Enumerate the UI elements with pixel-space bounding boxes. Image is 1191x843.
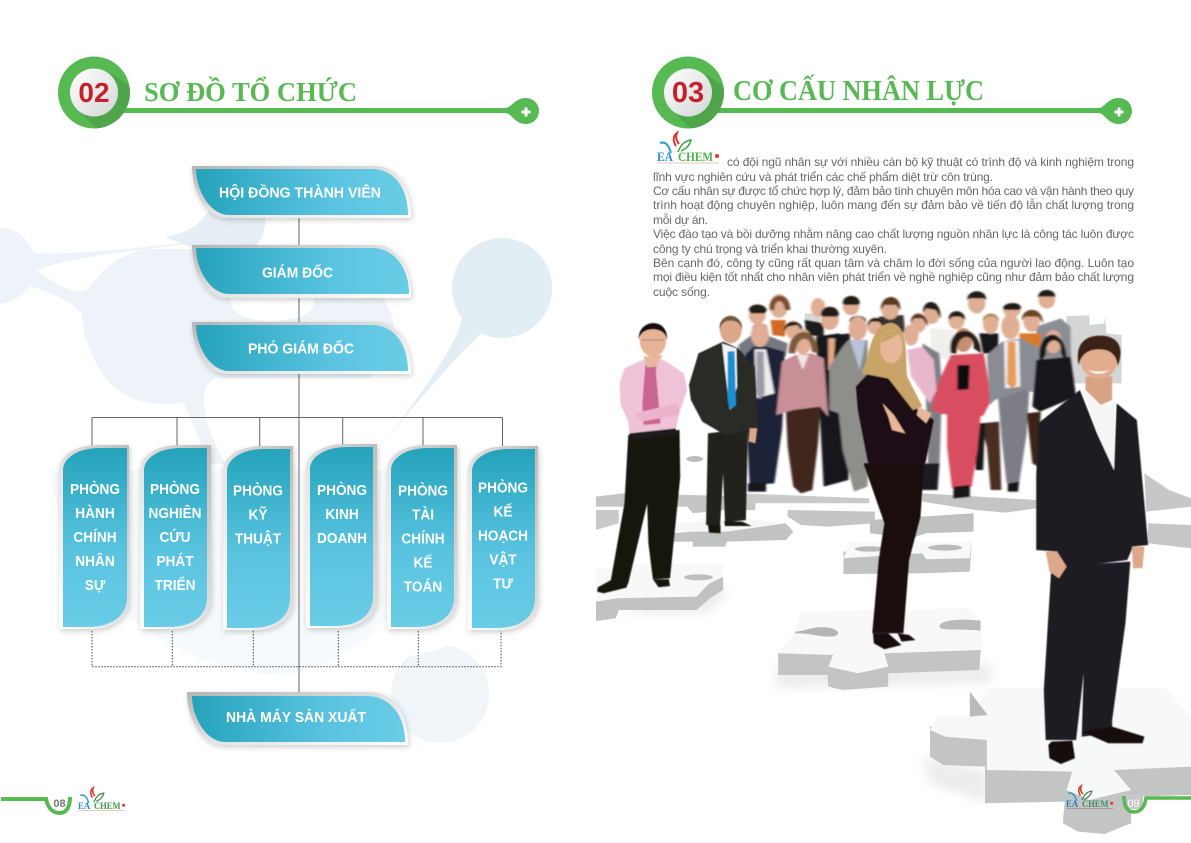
department: phong kinh doanh bbox=[306, 444, 377, 628]
woman legs behind bbox=[980, 422, 1001, 490]
footer left logo: CHEM bbox=[94, 802, 121, 812]
box: giam doc: GIÁM ĐỐC bbox=[262, 264, 333, 282]
box: pho giam doc bbox=[192, 322, 411, 374]
box: hoi dong thanh vien: HỘI ĐỒNG THÀNH VIÊN bbox=[219, 184, 381, 202]
department: phong kinh doanh: KINH bbox=[325, 506, 359, 523]
background: pale molecule shapes bbox=[0, 205, 552, 743]
inline logo: EA CHEM: EA bbox=[657, 150, 673, 164]
title: co cau nhan luc: CƠ CẤU NHÂN LỰC bbox=[733, 75, 984, 107]
woman in front bbox=[856, 323, 934, 649]
department: phong hanh chinh nhan su: PHÒNG bbox=[70, 479, 120, 498]
box: hoi dong thanh vien bbox=[192, 166, 411, 218]
body text: cuộc sống. bbox=[653, 285, 710, 299]
department: phong nghien cuu phat trien: PHÁT bbox=[156, 552, 194, 570]
department: phong ke hoach vat tu: KẾ bbox=[494, 503, 512, 521]
department: phong nghien cuu phat trien bbox=[140, 445, 211, 629]
department: phong hanh chinh nhan su: SỰ bbox=[85, 577, 105, 594]
body text: mọi điều kiện tốt nhất cho nhân viên phát triển về nghề nghiệp cũng như đảm bảo chất lượng bbox=[653, 270, 1134, 284]
department: phong ke hoach vat tu: PHÒNG bbox=[478, 478, 528, 497]
footer left logo bbox=[78, 788, 125, 812]
department: phong ky thuat: THUẬT bbox=[235, 529, 281, 548]
background crowd bbox=[738, 290, 1076, 498]
man pink shirt back bbox=[922, 343, 942, 468]
department: phong kinh doanh: DOANH bbox=[317, 530, 367, 547]
number 02: 02 bbox=[78, 77, 110, 108]
heads back row bbox=[749, 291, 1055, 339]
man grey suit centre bbox=[829, 340, 871, 492]
department: phong tai chinh ke toan: KẾ bbox=[414, 554, 432, 572]
man dark suit bbox=[816, 333, 850, 487]
body text: lĩnh vực nghiên cứu và phát triển các chế phẩm diệt trừ côn trùng. bbox=[653, 170, 993, 184]
department: phong ky thuat bbox=[223, 446, 293, 630]
department: phong ky thuat: PHÒNG bbox=[233, 481, 283, 500]
box: nha may san xuat bbox=[187, 692, 408, 745]
box: giam doc bbox=[192, 245, 411, 298]
box: nha may san xuat: NHÀ MÁY SẢN XUẤT bbox=[226, 709, 366, 726]
department: phong ke hoach vat tu: VẬT bbox=[489, 550, 517, 569]
department: phong tai chinh ke toan: TOÁN bbox=[404, 578, 442, 596]
department: phong tai chinh ke toan bbox=[387, 445, 457, 629]
department: phong nghien cuu phat trien: TRIỂN bbox=[155, 575, 195, 594]
number 03: 03 bbox=[672, 77, 704, 109]
department: phong kinh doanh: PHÒNG bbox=[317, 480, 367, 499]
man grey suit right bbox=[998, 388, 1029, 483]
footer left logo: EA bbox=[78, 802, 90, 812]
footer right logo: CHEM bbox=[1082, 800, 1109, 810]
body text: có đội ngũ nhân sự với nhiều cán bộ kỹ thuật có trình độ và kinh nghiệm trong bbox=[727, 155, 1134, 169]
footer right: page number 09: 09 bbox=[1127, 798, 1140, 810]
woman red suit bbox=[947, 410, 981, 488]
man in front right bbox=[1036, 336, 1148, 764]
department: phong hanh chinh nhan su: HÀNH bbox=[75, 504, 115, 522]
body text: Cơ cấu nhân sự được tổ chức hợp lý, đảm bảo tính chuyên môn hóa cao và vận hành theo quy bbox=[653, 184, 1134, 198]
department: phong hanh chinh nhan su bbox=[59, 445, 129, 629]
org chart connector lines bbox=[92, 218, 502, 692]
box: pho giam doc: PHÓ GIÁM ĐỐC bbox=[248, 340, 354, 358]
department: phong nghien cuu phat trien: PHÒNG bbox=[150, 479, 200, 498]
department: phong ke hoach vat tu bbox=[468, 446, 538, 630]
section 03 header bbox=[652, 56, 1132, 132]
footer right: page number 09 bbox=[1124, 795, 1191, 812]
department: phong hanh chinh nhan su: NHÂN bbox=[75, 551, 115, 570]
body text bbox=[653, 155, 1134, 299]
title: so do to chuc: SƠ ĐỒ TỔ CHỨC bbox=[144, 76, 357, 107]
department: phong ky thuat: KỸ bbox=[249, 505, 268, 524]
woman black dress bbox=[1027, 412, 1041, 467]
man with blue tie bbox=[689, 315, 758, 533]
body text: công ty chú trọng và triển khai thường xuyên. bbox=[653, 242, 887, 256]
footer left: page number 08 bbox=[1, 797, 70, 813]
department: phong hanh chinh nhan su: CHÍNH bbox=[73, 528, 117, 546]
department: phong nghien cuu phat trien: CỨU bbox=[159, 527, 191, 546]
department: phong tai chinh ke toan: TÀI bbox=[412, 506, 434, 524]
body text: trình hoạt động chuyên nghiệp, luôn mang đến sự đảm bảo về tiến độ lẫn chất lượng trong bbox=[653, 197, 1134, 212]
inline logo: EA CHEM: CHEM bbox=[678, 150, 713, 164]
inline logo: EA CHEM bbox=[657, 133, 719, 164]
department: phong ke hoach vat tu: TƯ bbox=[493, 576, 513, 593]
department: phong ke hoach vat tu: HOẠCH bbox=[478, 528, 528, 545]
footer left: page number 08: 08 bbox=[53, 798, 66, 810]
man navy suit bbox=[744, 347, 785, 485]
body text: Bên cạnh đó, công ty cũng rất quan tâm và chăm lo đời sống của người lao động. Luôn tạo bbox=[653, 256, 1134, 270]
department: phong nghien cuu phat trien: NGHIÊN bbox=[148, 503, 202, 522]
body text: Việc đào tạo và bồi dưỡng nhằm nâng cao chất lượng nguồn nhân lực là công tác luôn được bbox=[653, 226, 1134, 241]
department: phong tai chinh ke toan: PHÒNG bbox=[398, 481, 448, 500]
puzzle pieces bbox=[596, 313, 1191, 834]
body text: mỗi dự án. bbox=[653, 212, 708, 227]
footer right logo bbox=[1066, 786, 1113, 810]
photo: staff on puzzle pieces bbox=[596, 290, 1191, 834]
footer right logo: EA bbox=[1066, 800, 1078, 810]
man in pink shirt bbox=[597, 323, 687, 593]
woman pink jacket bbox=[786, 405, 821, 493]
department: phong tai chinh ke toan: CHÍNH bbox=[401, 530, 445, 548]
section 02 header bbox=[58, 56, 539, 132]
